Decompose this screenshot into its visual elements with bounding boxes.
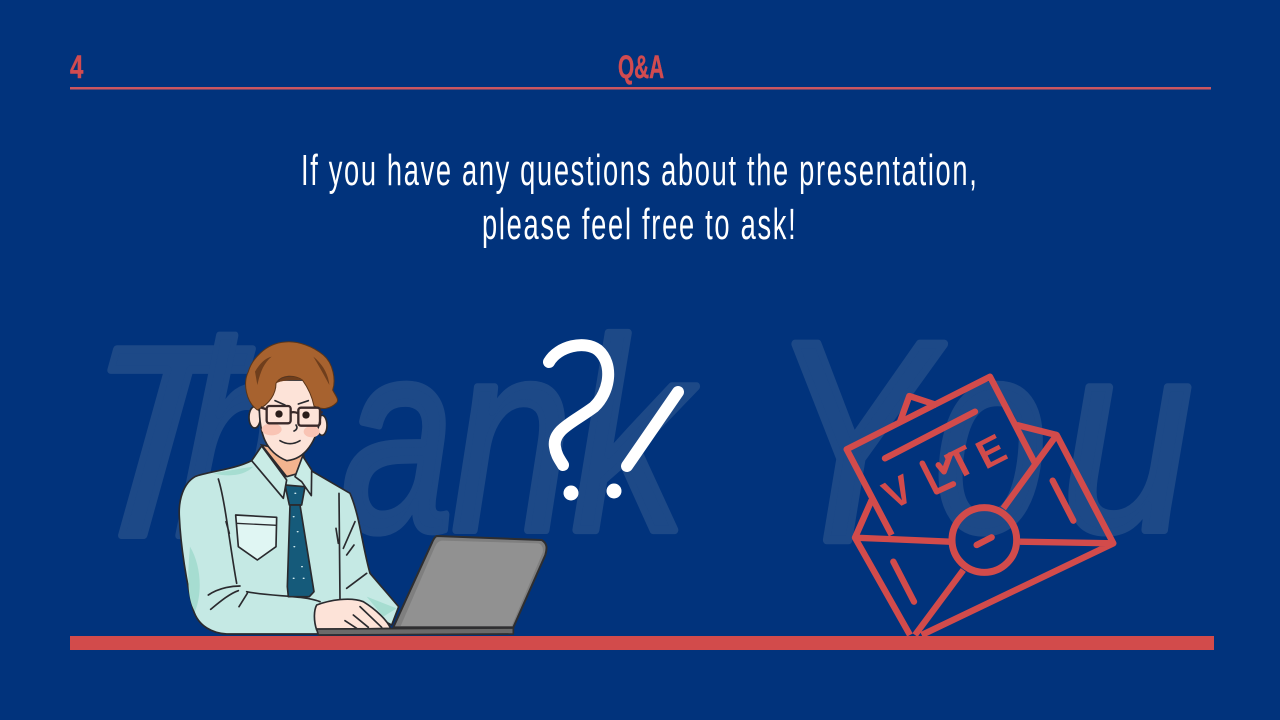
face — [259, 380, 321, 461]
eyes — [275, 410, 310, 419]
envelope outline — [855, 435, 1113, 635]
message text — [301, 146, 977, 249]
message text: If you have any questions about the presentation, — [301, 146, 977, 195]
collar — [252, 446, 312, 498]
pocket flap line — [236, 523, 277, 525]
envelope back flaps — [900, 396, 1057, 435]
watermark: Thank You: Y — [770, 281, 946, 601]
shirt shading — [188, 467, 397, 617]
watermark: Thank You: k — [572, 285, 697, 588]
watermark: Thank You: u — [1062, 286, 1193, 588]
neck — [262, 445, 307, 477]
watermark: Thank You: o — [935, 287, 1046, 588]
hair — [246, 342, 338, 410]
shirt seams — [208, 479, 367, 609]
ballot paper — [847, 377, 1035, 535]
section heading: Q&A — [618, 50, 664, 85]
ballot word: VOTE: E — [969, 425, 1014, 478]
header rule — [70, 87, 1211, 90]
laptop screen face — [401, 541, 543, 626]
hand — [314, 599, 391, 630]
nose and smile — [275, 401, 308, 444]
ballot word: VOTE — [875, 425, 1014, 519]
finger lines — [345, 607, 382, 628]
glasses — [261, 406, 323, 426]
illustration: man at laptop — [179, 342, 547, 635]
desk bar — [70, 636, 1214, 650]
watermark: Thank You: a — [342, 287, 453, 588]
cheeks — [262, 423, 320, 437]
section number: 4 — [70, 49, 84, 85]
laptop screen — [393, 536, 547, 627]
question mark — [549, 345, 608, 500]
watermark: Thank You: h — [171, 288, 298, 594]
watermark: Thank You: T — [66, 292, 259, 593]
ballot word: VOTE: T — [939, 436, 982, 489]
message text: please feel free to ask! — [482, 200, 796, 249]
laptop base — [317, 628, 513, 635]
ballot word: VOTE: V — [875, 465, 920, 519]
icon: vote envelope — [847, 377, 1113, 635]
exclamation mark — [606, 392, 678, 498]
watermark: Thank You — [66, 281, 1193, 601]
watermark: Thank You: n — [452, 286, 572, 588]
ears — [249, 407, 327, 435]
pocket — [236, 515, 277, 560]
detail lines — [885, 412, 1073, 602]
shirt body — [179, 461, 399, 634]
envelope seal — [952, 508, 1017, 572]
hair dark fringe — [255, 357, 329, 385]
tie — [285, 485, 314, 597]
